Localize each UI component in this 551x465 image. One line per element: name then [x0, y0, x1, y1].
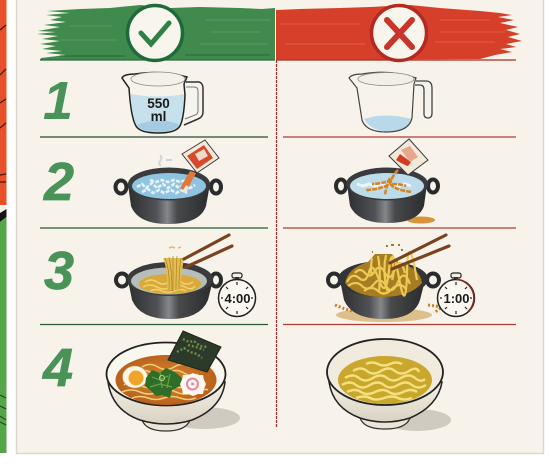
finished ramen bowl — [106, 331, 240, 431]
timer 4:00: 4:00 — [224, 291, 251, 306]
naruto — [180, 373, 206, 396]
icon: green check badge — [128, 6, 182, 60]
header red underline — [276, 59, 516, 61]
step number 2: 2 — [43, 152, 74, 212]
egg — [122, 366, 148, 388]
row dividers: good column — [40, 137, 268, 324]
pot step 2 bad: packet spilling over — [336, 139, 438, 224]
header green underline — [40, 59, 275, 61]
icon: red cross badge — [372, 6, 426, 60]
pot step 3 bad: overcooked noodles with spills — [328, 235, 449, 322]
green header brush band — [37, 5, 275, 60]
empty measuring cup, low water — [349, 72, 432, 132]
row dividers: bad column — [283, 137, 516, 324]
timer 4:00 — [218, 273, 256, 316]
pot step 3 good: noodles and chopsticks — [116, 235, 232, 319]
timer 1:00 — [438, 273, 474, 316]
measuring cup with 550 ml: 550 — [147, 96, 170, 111]
nori — [168, 331, 221, 372]
timer 1:00: 1:00 — [443, 291, 470, 306]
plain noodle bowl — [327, 339, 451, 431]
scallions — [145, 368, 182, 398]
step number 3: 3 — [44, 241, 74, 301]
step number 4: 4 — [42, 338, 73, 398]
pot step 2 good: boiling water and sachet — [116, 140, 221, 224]
center dashed divider — [276, 60, 278, 427]
measuring cup with 550 ml: ml — [151, 109, 166, 124]
step number 1: 1 — [43, 71, 73, 131]
measuring cup with 550 ml — [122, 72, 203, 133]
red header brush band — [276, 5, 522, 60]
left edge strip — [0, 0, 6, 453]
